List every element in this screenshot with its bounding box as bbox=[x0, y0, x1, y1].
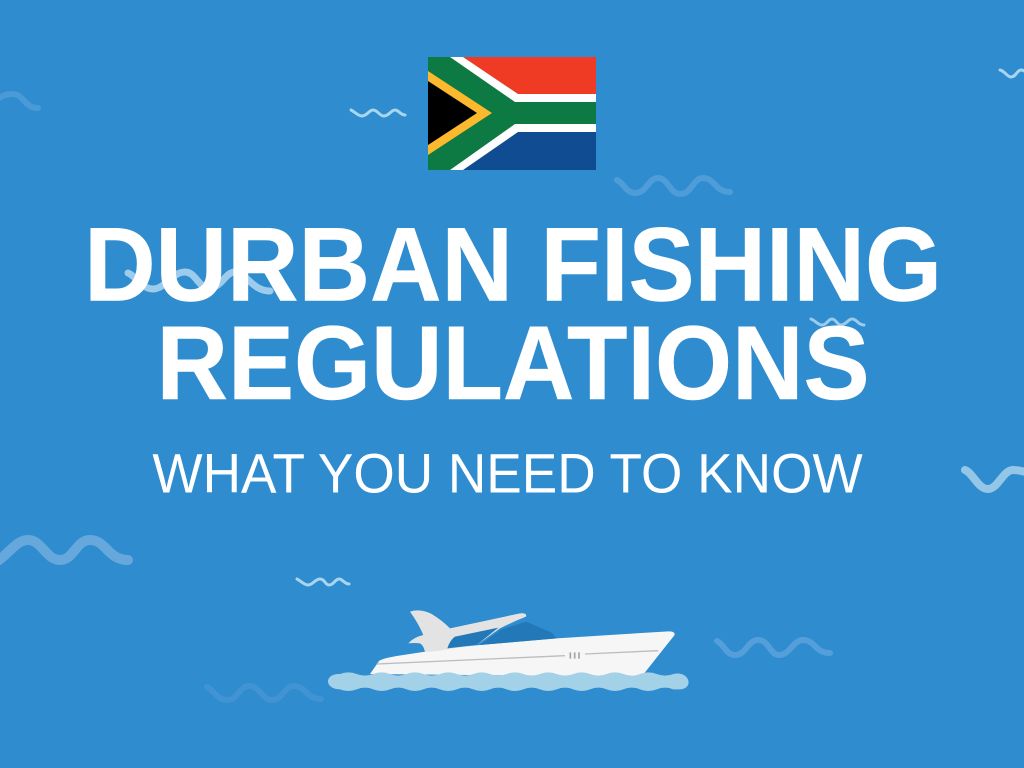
boat vent marks bbox=[570, 652, 579, 659]
icon: South African flag bbox=[428, 57, 596, 170]
boat hull bbox=[370, 631, 675, 677]
title bbox=[84, 206, 942, 422]
boat flybridge fin bbox=[408, 610, 526, 652]
subtitle: WHAT YOU NEED TO KNOW bbox=[152, 443, 863, 505]
icon: white motor yacht on water bbox=[328, 610, 689, 691]
title: DURBAN FISHING bbox=[84, 206, 942, 323]
title: REGULATIONS bbox=[156, 304, 870, 422]
boat windows bbox=[447, 628, 498, 648]
water band bbox=[328, 672, 689, 691]
boat hull stripe bbox=[377, 651, 658, 664]
